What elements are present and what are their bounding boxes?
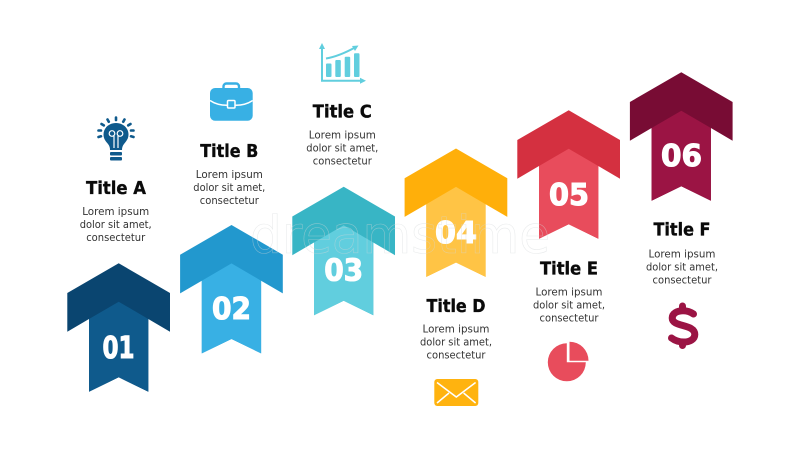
- text block: Title C: Lorem ipsum: [309, 128, 376, 142]
- watermark: dreamstime: [250, 206, 550, 266]
- text block: Title C: consectetur: [313, 154, 372, 168]
- text block: Title F: Title F: [654, 220, 710, 240]
- arrow 04: [405, 148, 507, 277]
- text block: Title C: Title C: [313, 102, 372, 122]
- text block: Title B: dolor sit amet,: [193, 181, 265, 194]
- text block: Title F: [646, 220, 718, 286]
- arrow 02: 02: [212, 292, 251, 327]
- arrow 01: 01: [102, 331, 134, 366]
- icon: dollar sign: [672, 306, 695, 346]
- text block: Title F: dolor sit amet,: [646, 260, 718, 274]
- text block: Title B: Lorem ipsum: [196, 168, 263, 181]
- arrow 05: 05: [549, 178, 589, 213]
- text block: Title A: Lorem ipsum: [82, 205, 149, 218]
- text block: Title E: dolor sit amet,: [533, 299, 605, 312]
- text block: Title C: dolor sit amet,: [306, 142, 378, 154]
- text block: Title D: [420, 297, 492, 362]
- icon: growth chart: [319, 43, 366, 84]
- text block: Title B: Title B: [200, 142, 258, 162]
- arrow 06: [630, 72, 733, 201]
- text block: Title B: consectetur: [200, 194, 259, 207]
- text block: Title D: Title D: [426, 297, 486, 317]
- arrow 05: [517, 110, 620, 239]
- text block: Title A: [80, 179, 152, 244]
- text block: Title D: Lorem ipsum: [422, 323, 490, 336]
- text block: Title C: [306, 102, 378, 168]
- icon: light bulb: [98, 118, 134, 160]
- text block: Title D: consectetur: [426, 349, 486, 362]
- text block: Title F: consectetur: [652, 274, 712, 286]
- text block: Title E: Lorem ipsum: [536, 286, 602, 299]
- text block: Title B: [193, 142, 265, 207]
- arrow 06: 06: [661, 139, 702, 174]
- text block: Title E: Title E: [540, 260, 598, 280]
- icon: briefcase: [210, 84, 253, 121]
- text block: Title A: dolor sit amet,: [80, 218, 152, 231]
- text block: Title E: consectetur: [540, 312, 599, 325]
- text block: Title F: Lorem ipsum: [648, 248, 716, 260]
- text block: Title A: consectetur: [86, 231, 146, 244]
- arrow 02: [180, 225, 283, 353]
- arrow 03: 03: [324, 254, 363, 289]
- arrow 01: [67, 263, 170, 392]
- arrow 04: 04: [435, 216, 477, 251]
- arrow 03: [292, 187, 395, 315]
- text block: Title D: dolor sit amet,: [420, 336, 492, 349]
- text block: Title E: [533, 260, 605, 325]
- icon: pie chart: [548, 342, 588, 381]
- icon: envelope: [434, 379, 478, 406]
- text block: Title A: Title A: [86, 179, 146, 199]
